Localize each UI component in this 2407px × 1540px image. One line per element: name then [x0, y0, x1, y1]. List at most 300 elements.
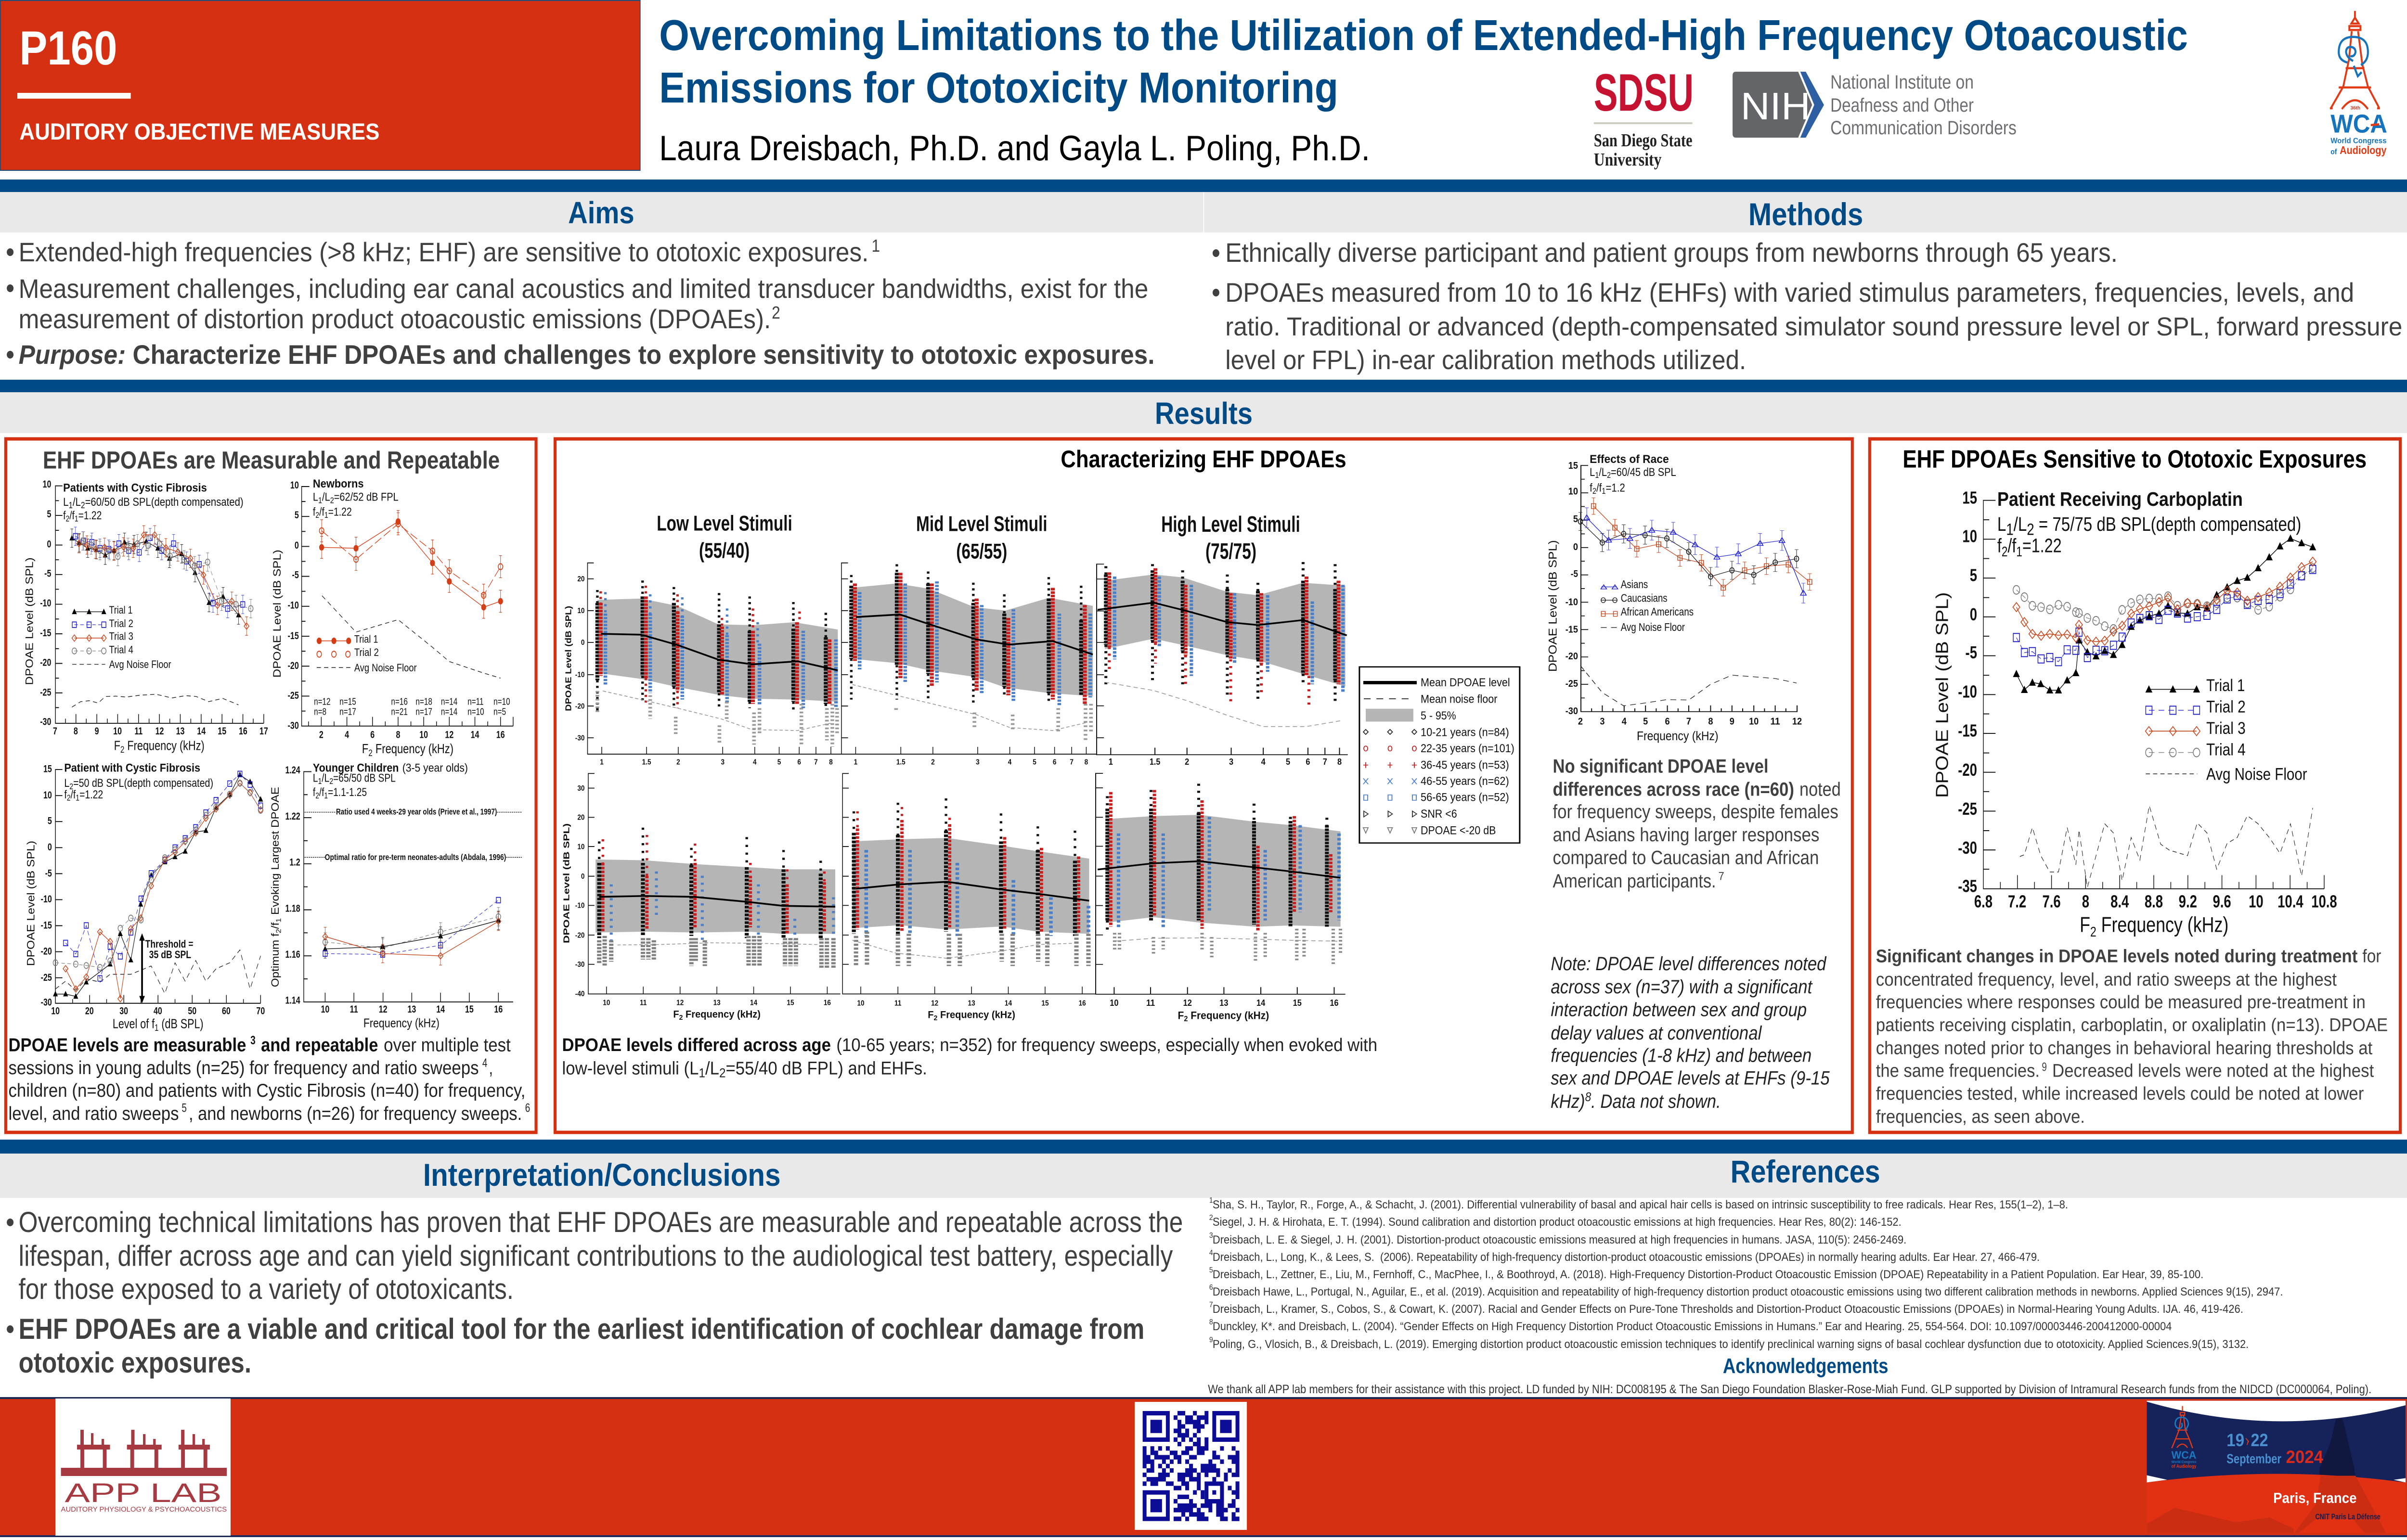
chart: patient with cystic fibrosis level sweep: 10 [43, 789, 52, 800]
text block: methods: Ethnically diverse participant and patient groups from newborns through 65 years. [1225, 238, 2118, 268]
chart: low level extended high frequencies: 30 [577, 784, 584, 793]
chart: low level conventional frequencies: 1 [600, 758, 604, 767]
logo: NIH NIDCD: Deafness and Other [1830, 94, 1974, 116]
legend: Avg Noise Floor [1621, 621, 1685, 633]
band: top blue bar [0, 180, 2407, 192]
chart: low level conventional frequencies: 3 [721, 758, 725, 767]
logo: NIH NIDCD: National Institute on [1830, 71, 1974, 92]
legend: scatter plots: 10-21 years (n=84) [1421, 725, 1509, 739]
chart: patient with cystic fibrosis level sweep: 60 [222, 1005, 231, 1016]
band: aims and methods heading bar [0, 192, 2407, 232]
legend: Caucasians [1621, 592, 1668, 604]
chart: effects of race: 1 [1595, 471, 1599, 480]
chart: high level conventional frequencies: 8 [1337, 757, 1342, 767]
chart: mid level conventional frequencies: 5 [1033, 758, 1036, 767]
chart: patient with cystic fibrosis level sweep: 20 [85, 1005, 94, 1016]
text block: race finding: compared to Caucasian and African [1553, 847, 1819, 869]
legend: Avg Noise Floor [354, 662, 417, 674]
chart: newborns: 2 [330, 496, 334, 505]
legend: Trial 3 [109, 631, 133, 642]
chart: patient with cystic fibrosis level sweep: 2 [67, 794, 71, 803]
chart: younger children: Younger Children [313, 761, 399, 774]
chart: newborns: F [362, 742, 368, 757]
chart: newborns: 2 [315, 511, 319, 520]
text block: conclusions: Overcoming technical limitations has proven that EHF DPOAEs are measurable and repeatable across the [19, 1206, 1183, 1238]
chart: effects of race: 15 [1568, 460, 1578, 471]
legend [317, 633, 417, 674]
text block: conclusions: lifespan, differ across age and can yield significant contributions to the audiological test battery, especially [19, 1240, 1173, 1272]
text block: acknowledgements: We thank all APP lab members for their assistance with this project. LD funded by NIH: DC008195 & The San Diego Foundation Blasker-Rose-Miah Fund. GLP supported by Division of Intramural Research funds from the NIDCD (DC000064, Poling). [1208, 1383, 2371, 1396]
threshold label: Threshold = [145, 938, 193, 950]
conference banner: CNIT Paris La Défense [2315, 1513, 2381, 1522]
chart: patients with cystic fibrosis frequency sweep: -25 [40, 686, 51, 698]
text block: methods: ratio. Traditional or advanced (depth-compensated simulator sound pressure level or SPL, forward pressure [1225, 312, 2402, 341]
text block: measurable and repeatable finding: sessions in young adults (n=25) for frequency and ratio sweeps [8, 1057, 479, 1078]
chart: patient with cystic fibrosis level sweep: DPOAE Level (dB SPL) [26, 841, 37, 966]
chart: low level conventional frequencies: 6 [797, 758, 801, 767]
chart: effects of race: L [1590, 465, 1597, 478]
legend: scatter plots: SNR <6 [1421, 807, 1457, 821]
text block: measurable and repeatable finding: children (n=80) and patients with Cystic Fibrosis (n=40) for frequency, [8, 1080, 525, 1101]
chart: younger children: /L [322, 771, 329, 784]
chart: effects of race: 10 [1749, 716, 1759, 727]
chart: patients with cystic fibrosis frequency sweep [24, 478, 268, 755]
chart: patient receiving carboplatin: /L [2014, 513, 2027, 535]
session label: AUDITORY OBJECTIVE MEASURES [19, 118, 379, 145]
band: conclusions heading bar [0, 1154, 2407, 1198]
chart: effects of race [1546, 452, 1810, 743]
conference banner [2147, 1401, 2406, 1533]
chart: patients with cystic fibrosis frequency sweep: 2 [81, 500, 85, 510]
chart: younger children: Evoking Largest DPOAE [270, 787, 281, 918]
text block: note on sex differences: delay values at conventional [1551, 1023, 1762, 1044]
column heading: mid level: Mid Level Stimuli [916, 512, 1047, 536]
chart: mid level extended high frequencies: 14 [1005, 1000, 1012, 1008]
column heading: low level: Low Level Stimuli [657, 512, 792, 535]
conference banner: WCA [2172, 1449, 2196, 1461]
chart: younger children: 1 [275, 918, 283, 923]
title: Overcoming Limitations to the Utilization of Extended-High Frequency Otoacoustic [659, 11, 2188, 59]
chart: patients with cystic fibrosis frequency sweep: /L [73, 496, 81, 509]
chart: younger children: 1.24 [285, 764, 300, 776]
chart: patient with cystic fibrosis level sweep: f [64, 788, 66, 801]
chart: newborns: 1 [324, 511, 328, 520]
chart: patient with cystic fibrosis level sweep: -20 [41, 945, 52, 957]
chart: low level extended high frequencies: 20 [577, 814, 584, 822]
chart: patients with cystic fibrosis frequency sweep: 9 [95, 725, 99, 736]
text block: race finding: noted [1799, 779, 1841, 800]
chart: mid level conventional frequencies: 3 [976, 758, 980, 767]
heading: interpretation and conclusions: Interpretation/Conclusions [423, 1158, 781, 1193]
threshold label: 35 dB SPL [149, 949, 191, 961]
chart: patient receiving carboplatin: 5 [1970, 565, 1977, 585]
legend: Asians [1621, 578, 1648, 591]
conference banner: 22 [2251, 1430, 2268, 1450]
chart: patient with cystic fibrosis level sweep: 70 [256, 1005, 265, 1016]
legend: scatter plots: DPOAE <-20 dB [1421, 824, 1496, 837]
sample sizes: n=15 [339, 696, 356, 707]
text block: age finding: (10-65 years; n=352) for frequency sweeps, especially when evoked with [836, 1035, 1377, 1055]
chart: patient with cystic fibrosis level sweep: 1 [155, 1023, 158, 1033]
text block: measurable and repeatable finding: and repeatable [261, 1034, 378, 1055]
chart: patient receiving carboplatin: /f [2007, 534, 2017, 556]
sample sizes: n=17 [415, 706, 432, 717]
chart: high level conventional frequencies: 6 [1306, 757, 1310, 767]
chart: patient receiving carboplatin: 8.4 [2110, 892, 2129, 911]
text block: age finding: low-level stimuli (L [562, 1058, 690, 1078]
chart: patient with cystic fibrosis level sweep: (dB SPL) [158, 1017, 204, 1031]
chart: patients with cystic fibrosis frequency sweep: 16 [239, 725, 247, 736]
chart: patients with cystic fibrosis frequency sweep: -10 [40, 597, 51, 608]
chart: patient receiving carboplatin: f [1997, 534, 2002, 556]
text block: note on sex differences: interaction between sex and group [1551, 1000, 1807, 1021]
chart: effects of race: 2 [1592, 486, 1596, 496]
text block: measurable and repeatable finding: , and newborns (n=26) for frequency sweeps. [189, 1103, 522, 1124]
chart: newborns: 8 [396, 729, 400, 740]
text block: note on sex differences: Note: DPOAE level differences noted [1551, 953, 1827, 975]
logo: WCA: World Congress [2330, 136, 2387, 145]
text block: aims: 1 [872, 236, 880, 256]
logo: WCA: of [2330, 148, 2337, 156]
text block: conclusions: EHF DPOAEs are a viable and critical tool for the earliest identification of cochlear damage from [19, 1313, 1144, 1345]
chart: patient with cystic fibrosis level sweep: 30 [119, 1005, 128, 1016]
conference banner: September [2226, 1451, 2281, 1466]
chart: effects of race: 5 [1573, 513, 1578, 525]
chart: patients with cystic fibrosis frequency sweep: -15 [40, 627, 51, 639]
chart: younger children: /f [270, 922, 281, 929]
chart: younger children: 1.14 [285, 995, 300, 1006]
chart: newborns: L [313, 490, 318, 503]
legend: Trial 4 [2206, 740, 2246, 759]
logo: SDSU: University [1594, 149, 1662, 169]
text block: treatment finding: the same frequencies. [1876, 1061, 2040, 1081]
chart: patient with cystic fibrosis level sweep: =1.22 [79, 788, 103, 801]
text block: race finding: for frequency sweeps, despite females [1553, 801, 1838, 822]
chart: patient receiving carboplatin: 10.8 [2311, 892, 2337, 911]
heading: Aims: Aims [568, 195, 634, 230]
text block: race finding: No significant DPOAE level [1553, 756, 1768, 777]
chart: patient receiving carboplatin: 9.2 [2179, 892, 2197, 911]
text block: measurable and repeatable finding: over multiple test [384, 1034, 511, 1055]
text block: age finding: /L [705, 1058, 719, 1078]
chart: mid level extended high frequencies: F [928, 1009, 933, 1021]
chart: patients with cystic fibrosis frequency sweep: 1 [68, 500, 73, 510]
chart: effects of race: -20 [1566, 651, 1578, 662]
text block: measurable and repeatable finding: 4 [482, 1056, 487, 1069]
logo: SDSU: SDSU [1594, 63, 1694, 122]
chart: younger children: 10 [321, 1003, 329, 1014]
text block: note on sex differences: . Data not shown. [1591, 1091, 1721, 1112]
chart: patients with cystic fibrosis frequency sweep: -5 [44, 567, 51, 579]
chart: low level extended high frequencies: 0 [581, 873, 584, 881]
text block: treatment finding: frequencies tested, while increased levels could be noted at lower [1876, 1084, 2364, 1104]
chart: younger children: Ratio used 4 weeks-29 year olds (Prieve et al., 1997) [336, 808, 497, 817]
text block: references: Dreisbach, L., Zettner, E., Liu, M., Fernhoff, C., MacPhee, I., & Boothroyd, A. (2018). High-Frequency Distortion-Product Otoacoustic Emission (DPOAE) Repeatability in a Patient Population. Ear Hear, 39, 85-100. [1213, 1268, 2203, 1281]
chart: effects of race: /L [1599, 465, 1607, 478]
location: Paris, France [2273, 1489, 2356, 1506]
legend: Avg Noise Floor [2206, 765, 2307, 783]
text block: references: 9 [1209, 1335, 1213, 1344]
chart: patient with cystic fibrosis level sweep [26, 761, 265, 1033]
legend: scatter plots: 5 - 95% [1421, 709, 1456, 722]
chart: effects of race: 1 [1602, 486, 1605, 496]
chart: patient receiving carboplatin: Patient Receiving Carboplatin [1997, 488, 2243, 510]
text block: age finding: 1 [699, 1066, 705, 1080]
chart: low level conventional frequencies: -30 [575, 734, 584, 743]
panel: characterizing EHF DPOAEs [555, 439, 1852, 1132]
text block: treatment finding [1876, 947, 2388, 1127]
sample sizes: n=18 [415, 696, 432, 707]
text block: measurable and repeatable finding [8, 1033, 530, 1124]
chart: low level extended high frequencies: Frequency (kHz) [683, 1009, 761, 1020]
chart: effects of race: 7 [1686, 716, 1691, 727]
logo: WCA: 36th [2351, 105, 2360, 110]
text block: treatment finding: Significant changes in DPOAE levels noted during treatment [1876, 947, 2357, 967]
chart: patient with cystic fibrosis level sweep: =50 dB SPL(depth compensated) [73, 777, 213, 790]
text block: measurable and repeatable finding: level, and ratio sweeps [8, 1103, 179, 1124]
text block: note on sex differences: frequencies (1-8 kHz) and between [1551, 1045, 1812, 1066]
chart: patients with cystic fibrosis frequency sweep: 0 [47, 538, 51, 550]
column heading: high level: (75/75) [1205, 539, 1256, 564]
legend: African Americans [1621, 606, 1694, 618]
chart: patient receiving carboplatin: F [2080, 913, 2090, 937]
chart: low level extended high frequencies: 10 [603, 999, 610, 1007]
chart: patient receiving carboplatin: 10.4 [2278, 892, 2303, 911]
text block: race finding [1553, 756, 1841, 892]
legend: scatter plots: Mean DPOAE level [1421, 676, 1510, 689]
text block: race finding: 7 [1719, 869, 1724, 883]
chart: patients with cystic fibrosis frequency sweep: -30 [40, 716, 51, 727]
chart: low level conventional frequencies: 4 [753, 758, 757, 767]
chart: newborns: 2 [319, 729, 324, 740]
chart: high level extended high frequencies: 11 [1146, 998, 1155, 1008]
chart: patient receiving carboplatin: 10 [1962, 526, 1977, 546]
chart: newborns: -25 [288, 690, 299, 701]
chart: patients with cystic fibrosis frequency sweep: Frequency (kHz) [124, 739, 205, 753]
logo: SDSU: San Diego State [1594, 130, 1693, 150]
legend: Trial 1 [354, 633, 378, 645]
chart: patient with cystic fibrosis level sweep: 1 [76, 794, 79, 803]
chart: high level extended high frequencies: F [1178, 1010, 1186, 1022]
chart: patient receiving carboplatin: =1.22 [2022, 534, 2062, 556]
chart: patient receiving carboplatin: = 75/75 dB SPL(depth compensated) [2034, 513, 2301, 535]
chart: newborns: -20 [288, 660, 299, 671]
chart: patients with cystic fibrosis frequency sweep: -20 [40, 656, 51, 668]
chart: newborns: 1 [318, 496, 322, 505]
chart: patient with cystic fibrosis level sweep: 10 [51, 1005, 60, 1016]
chart: high level extended high frequencies: 2 [1184, 1014, 1188, 1023]
chart: low level conventional frequencies: 8 [829, 758, 833, 767]
column heading: mid level: (65/55) [956, 539, 1007, 563]
text block: references: 3 [1209, 1231, 1213, 1240]
chart: high level conventional frequencies: 1.5 [1150, 757, 1160, 767]
sample sizes: n=10 [493, 696, 510, 707]
chart: younger children: Optimal ratio for pre-term neonates-adults (Abdala, 1996) [325, 853, 506, 862]
panel heading: EHF DPOAEs Sensitive to Ototoxic Exposures [1902, 445, 2367, 473]
chart: low level conventional frequencies: -20 [575, 702, 584, 711]
poster number block [0, 0, 640, 170]
text block: methods: DPOAEs measured from 10 to 16 kHz (EHFs) with varied stimulus parameters, frequencies, levels, and [1225, 278, 2354, 308]
chart: patients with cystic fibrosis frequency sweep: =1.22 [78, 509, 102, 522]
text block: conclusions [7, 1206, 1183, 1379]
chart: low level extended high frequencies: 13 [713, 999, 721, 1007]
chart: low level extended high frequencies: -40 [575, 990, 584, 998]
chart: patient receiving carboplatin: Frequency (kHz) [2096, 913, 2228, 937]
conference banner: World Congress [2172, 1460, 2196, 1464]
chart: high level conventional frequencies: 1 [1109, 757, 1113, 767]
chart: patients with cystic fibrosis frequency sweep: 13 [176, 725, 184, 736]
chart: patients with cystic fibrosis frequency sweep: 10 [113, 725, 122, 736]
chart: patient with cystic fibrosis level sweep: 5 [48, 815, 52, 826]
chart: high level conventional frequencies: 2 [1185, 757, 1189, 767]
threshold label [145, 938, 193, 961]
logo: SDSU [1594, 63, 1694, 169]
column heading: high level [1161, 512, 1300, 564]
band: results heading bar [0, 392, 2407, 433]
text block: conclusions: ototoxic exposures. [19, 1347, 251, 1379]
chart: newborns: 16 [496, 729, 505, 740]
chart: low level extended high frequencies: 10 [577, 843, 584, 851]
chart: younger children [270, 761, 522, 1030]
chart: mid level conventional frequencies: 6 [1053, 758, 1056, 767]
chart: younger children: 1.16 [285, 949, 300, 960]
text block: treatment finding: concentrated frequency, level, and ratio sweeps at the highest [1876, 970, 2337, 990]
chart: mid level extended high frequencies: 2 [934, 1014, 938, 1022]
chart: patients with cystic fibrosis frequency sweep: Patients with Cystic Fibrosis [63, 481, 207, 494]
chart: low level extended high frequencies: DPOAE Level (dB SPL) [562, 823, 571, 943]
legend [2146, 676, 2307, 783]
chart: mid level extended high frequencies [842, 773, 1095, 1022]
chart: younger children: 15 [465, 1003, 474, 1014]
chart: newborns: Newborns [313, 477, 364, 490]
chart: patient receiving carboplatin: 8 [2082, 892, 2089, 911]
text block: measurable and repeatable finding: DPOAE levels are measurable [8, 1034, 246, 1055]
chart: patient with cystic fibrosis level sweep: -5 [45, 867, 52, 879]
column heading: high level: High Level Stimuli [1161, 512, 1300, 537]
text block: note on sex differences: 8 [1585, 1090, 1591, 1104]
chart: patient receiving carboplatin: -10 [1958, 682, 1977, 701]
text block: references: Dreisbach, L., Kramer, S., Cobos, S., & Cowart, K. (2007). Racial and Gender Effects on Pure-Tone Thresholds and Distortion-Product Otoacoustic Emissions (DPOAEs) in Normal-Hearing Young Adults. IJA. 46, 419-426. [1213, 1303, 2243, 1315]
chart: newborns: =1.22 [328, 505, 352, 518]
heading: Results: Results [1155, 396, 1253, 431]
text block: methods [1213, 238, 2402, 375]
chart: high level extended high frequencies: 15 [1293, 998, 1302, 1008]
text block: note on sex differences: kHz) [1551, 1091, 1597, 1112]
chart: high level conventional frequencies [1097, 562, 1348, 767]
chart: newborns: f [313, 505, 315, 518]
chart: newborns: 10 [419, 729, 428, 740]
text block: aims [7, 236, 1154, 370]
text block: aims: Extended-high frequencies (>8 kHz; EHF) are sensitive to ototoxic exposures. [19, 237, 868, 268]
text block: references: 6 [1209, 1283, 1213, 1292]
chart: effects of race: 12 [1792, 716, 1802, 727]
chart: patients with cystic fibrosis frequency sweep: =60/50 dB SPL(depth compensated) [85, 496, 244, 509]
sample sizes: n=17 [339, 706, 356, 717]
chart: mid level extended high frequencies: 11 [894, 1000, 901, 1008]
chart: patients with cystic fibrosis frequency sweep: 8 [74, 725, 78, 736]
chart: patient receiving carboplatin: 2 [2090, 924, 2096, 940]
chart: low level extended high frequencies: F [673, 1009, 678, 1020]
chart: low level conventional frequencies: 1.5 [642, 758, 651, 767]
chart: low level conventional frequencies: 2 [676, 758, 680, 767]
text block: references: 8 [1209, 1318, 1213, 1326]
chart: newborns: -30 [288, 719, 299, 731]
chart: newborns: 10 [290, 479, 299, 490]
text block: age finding: =55/40 dB FPL) and EHFs. [725, 1058, 927, 1078]
chart: patients with cystic fibrosis frequency sweep: L [63, 496, 68, 509]
chart: newborns: 14 [471, 729, 479, 740]
text block: references: 5 [1209, 1266, 1213, 1274]
chart: newborns: 0 [295, 539, 299, 551]
chart: newborns: Frequency (kHz) [373, 742, 453, 757]
chart: newborns: /L [322, 490, 330, 503]
chart: effects of race: f [1590, 481, 1593, 494]
chart: effects of race: -25 [1566, 678, 1578, 689]
chart: low level conventional frequencies: -10 [575, 671, 584, 680]
chart: patient with cystic fibrosis level sweep: -15 [41, 920, 52, 931]
chart: younger children: 1.18 [285, 902, 300, 914]
text block: age finding: 2 [719, 1066, 725, 1080]
conference banner: of Audiology [2172, 1464, 2197, 1469]
chart: effects of race: 2 [1607, 471, 1611, 480]
logo: WCA: Audiology [2340, 144, 2387, 156]
text block: age finding [562, 1035, 1377, 1080]
chart: effects of race: DPOAE Level (dB SPL) [1546, 540, 1559, 672]
chart: low level extended high frequencies: 16 [824, 999, 831, 1007]
chart: younger children: =65/50 dB SPL [333, 771, 396, 784]
text block: race finding: American participants. [1553, 871, 1716, 892]
legend: scatter plots: 56-65 years (n=52) [1421, 791, 1509, 804]
chart: patient receiving carboplatin: 8.8 [2145, 892, 2163, 911]
text block: methods: level or FPL) in-ear calibration methods utilized. [1225, 345, 1746, 375]
chart: effects of race: 10 [1568, 486, 1578, 497]
chart: mid level conventional frequencies: 2 [931, 758, 935, 767]
chart: patient receiving carboplatin: L [1997, 513, 2006, 535]
chart: younger children: 11 [350, 1003, 358, 1014]
text block: references: Dreisbach, L., Long, K., & Lees, S. (2006). Repeatability of high-frequency distortion-product otoacoustic emissions (DPOAEs) in normally hearing adults. Ear Hear. 27, 466-479. [1213, 1251, 2040, 1263]
text block: note on sex differences: sex and DPOAE levels at EHFs (9-15 [1551, 1068, 1830, 1089]
heading: references: References [1731, 1155, 1880, 1190]
heading: acknowledgements: Acknowledgements [1723, 1354, 1888, 1378]
chart: low level extended high frequencies: -20 [575, 931, 584, 940]
legend: Trial 2 [2206, 697, 2246, 716]
title: Emissions for Ototoxicity Monitoring [659, 63, 1338, 112]
chart: patient receiving carboplatin: -20 [1958, 760, 1977, 780]
chart: effects of race: -10 [1566, 596, 1578, 607]
chart: patient receiving carboplatin: -5 [1966, 643, 1977, 662]
chart: newborns [272, 477, 513, 758]
band: results blue bar [0, 380, 2407, 392]
text block: treatment finding: frequencies where responses could be measured pre-treatment in [1876, 993, 2366, 1013]
chart: patient receiving carboplatin: 7.2 [2008, 892, 2026, 911]
chart: mid level extended high frequencies: 12 [931, 1000, 938, 1008]
logo: WCA [2330, 11, 2387, 156]
chart: patient receiving carboplatin: -35 [1958, 876, 1977, 896]
chart: patients with cystic fibrosis frequency sweep: DPOAE Level (dB SPL) [24, 557, 36, 685]
chart: effects of race: 9 [1730, 716, 1734, 727]
legend: Trial 1 [109, 604, 132, 616]
chart: newborns: 4 [345, 729, 349, 740]
text block: note on sex differences [1551, 953, 1830, 1112]
chart: mid level extended high frequencies: 16 [1079, 1000, 1086, 1008]
text block: references: 4 [1209, 1248, 1213, 1257]
sample sizes: n=12 [314, 696, 331, 707]
chart: patient receiving carboplatin: 1 [2016, 544, 2022, 560]
chart: effects of race: 11 [1770, 716, 1780, 727]
chart: effects of race: Frequency (kHz) [1637, 729, 1719, 743]
chart: newborns: /f [319, 505, 324, 518]
column heading: low level [657, 512, 792, 563]
